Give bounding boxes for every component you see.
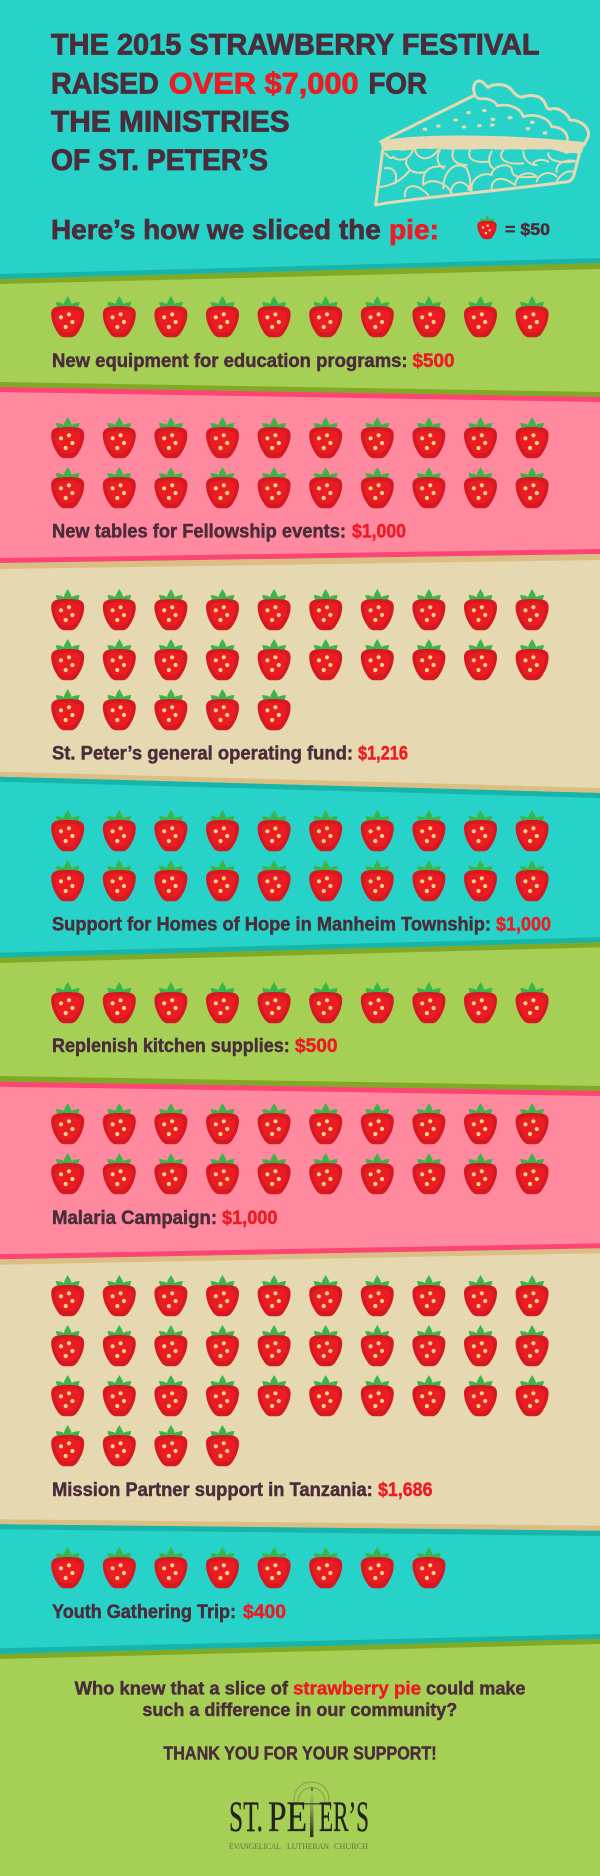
label: homes of hope: $1,000 xyxy=(496,915,551,936)
subheading: Here’s how we sliced the xyxy=(51,214,381,245)
title: OF ST. PETER’S xyxy=(51,144,268,177)
logo: St. Peter's Evangelical Lutheran Church: EVANGELICAL xyxy=(229,1841,281,1851)
strawberries: 8 xyxy=(51,1547,445,1588)
label: fellowship tables: New tables for Fellowship events: xyxy=(52,522,346,543)
strawberries: 20 xyxy=(51,1103,549,1194)
legend: one strawberry equals $50: = $50 xyxy=(505,220,550,239)
logo: St. Peter's Evangelical Lutheran Church xyxy=(229,1782,369,1851)
logo: St. Peter's Evangelical Lutheran Church: ER’S xyxy=(319,1794,369,1841)
strawberries: 10 xyxy=(51,982,549,1023)
strawberries: 10 xyxy=(51,296,549,337)
panel: fellowship tables xyxy=(0,387,600,563)
thank you: THANK YOU FOR YOUR SUPPORT! xyxy=(163,1742,437,1763)
logo: St. Peter's Evangelical Lutheran Church: CHURCH xyxy=(334,1841,368,1851)
label: education programs: $500 xyxy=(412,351,454,372)
panel: mission partner support xyxy=(0,1248,600,1531)
title: FOR xyxy=(368,67,427,100)
label: general operating fund: $1,216 xyxy=(358,743,408,764)
strawberries: 34 xyxy=(51,1275,549,1466)
label: kitchen supplies: $500 xyxy=(295,1036,338,1057)
label: malaria campaign: Malaria Campaign: xyxy=(52,1208,217,1229)
title: THE MINISTRIES xyxy=(51,106,290,139)
panel: header xyxy=(0,0,600,279)
title: RAISED xyxy=(51,67,159,100)
panel: education programs xyxy=(0,263,600,397)
logo: St. Peter's Evangelical Lutheran Church: LUTHERAN xyxy=(287,1841,329,1851)
subheading: pie: xyxy=(389,214,439,245)
strawberries: 20 xyxy=(51,417,549,508)
panel: general operating fund xyxy=(0,554,600,793)
title xyxy=(51,28,540,177)
panel: homes of hope xyxy=(0,777,600,958)
panel: footer xyxy=(0,1639,600,1876)
logo: St. Peter's Evangelical Lutheran Church: PE xyxy=(268,1794,307,1841)
label: youth gathering trip: Youth Gathering Trip: xyxy=(52,1602,236,1623)
closing message: could make xyxy=(426,1677,526,1698)
legend: one strawberry equals $50 xyxy=(477,215,550,239)
label: fellowship tables: $1,000 xyxy=(352,522,406,543)
panel: malaria campaign xyxy=(0,1082,600,1259)
closing message: such a difference in our community? xyxy=(142,1699,457,1720)
label: education programs: New equipment for education programs: xyxy=(52,351,408,372)
label: mission partner support: Mission Partner support in Tanzania: xyxy=(52,1480,373,1501)
closing message: strawberry pie xyxy=(293,1677,421,1698)
panel: youth gathering trip xyxy=(0,1524,600,1654)
title: THE 2015 STRAWBERRY FESTIVAL xyxy=(51,28,540,61)
label: homes of hope: Support for Homes of Hope in Manheim Township: xyxy=(52,915,491,936)
logo: St. Peter's Evangelical Lutheran Church: ST. xyxy=(229,1794,263,1841)
label: general operating fund: St. Peter’s general operating fund: xyxy=(52,743,353,764)
closing message xyxy=(75,1677,525,1720)
panel: kitchen supplies xyxy=(0,942,600,1091)
strawberries: 20 xyxy=(51,810,549,901)
title: OVER $7,000 xyxy=(169,67,359,100)
label: kitchen supplies: Replenish kitchen supplies: xyxy=(52,1036,290,1057)
icon: pie slice xyxy=(376,81,588,205)
label: youth gathering trip: $400 xyxy=(243,1602,286,1623)
label: mission partner support: $1,686 xyxy=(378,1480,432,1501)
closing message: Who knew that a slice of xyxy=(75,1677,289,1698)
strawberries: 25 xyxy=(51,589,549,730)
label: malaria campaign: $1,000 xyxy=(222,1208,278,1229)
